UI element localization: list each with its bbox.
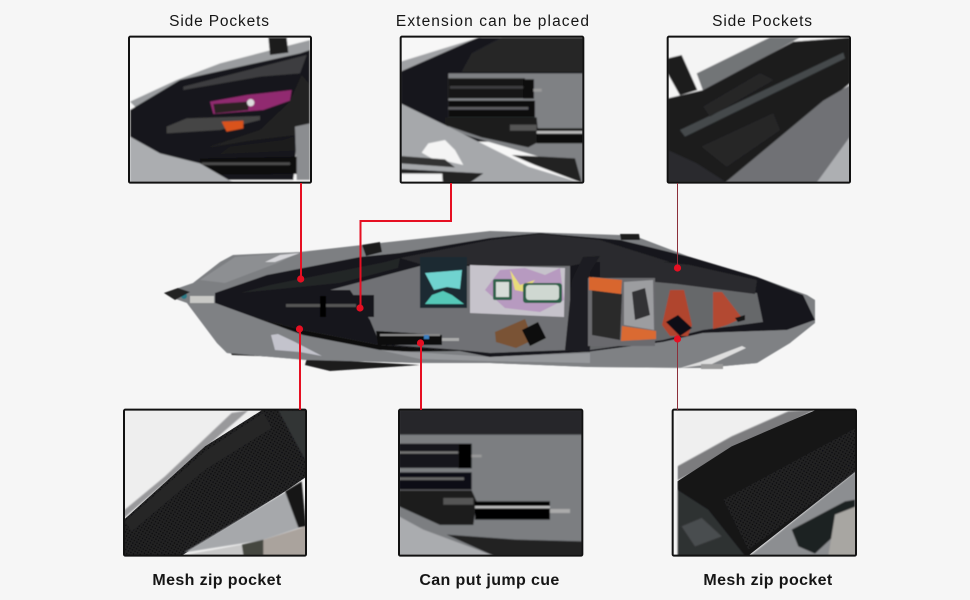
handle tabs: [362, 242, 382, 256]
panel: side pockets photo left: [129, 37, 311, 183]
tip pulls: [701, 364, 723, 369]
bag floor: [330, 266, 570, 353]
caption: mesh zip pocket left: Mesh zip pocket: [152, 572, 282, 589]
connector: mesh zip pocket left: [296, 325, 303, 410]
plastic organizer: [588, 278, 655, 346]
card: chalk holder pack: [470, 265, 565, 317]
connector: jump cue: [417, 339, 424, 410]
bag: open cue case: [164, 231, 815, 371]
panel: mesh zip pocket photo left: [124, 410, 306, 556]
logo marks: [265, 253, 300, 262]
heading: extension can be placed: Extension can be placed: [396, 13, 590, 30]
connector: side pockets left: [297, 183, 304, 283]
brown leather holder: [495, 319, 533, 348]
lower flap grey: [187, 303, 815, 368]
orange labels: [589, 277, 622, 294]
lower zip flap: [215, 303, 460, 352]
upper lining folds: [400, 234, 670, 266]
zipper head: [190, 296, 214, 303]
divider pocket: [565, 256, 600, 352]
connector: side pockets right: [674, 183, 681, 272]
bag outer shell: [164, 231, 815, 368]
bag interior lining: [215, 233, 815, 357]
panel: mesh zip pocket photo right: [673, 410, 856, 556]
panel: jump cue photo: [399, 410, 582, 556]
card: game box: [420, 257, 467, 308]
panel: extension photo: [401, 37, 583, 183]
caption: mesh zip pocket right: Mesh zip pocket: [703, 572, 833, 589]
panel: side pockets photo right: [668, 37, 850, 183]
bag bottom shadow and strap: [227, 347, 420, 371]
heading: side pockets right: Side Pockets: [712, 13, 813, 30]
connector: extension: [356, 183, 451, 312]
heading: side pockets left: Side Pockets: [169, 13, 270, 30]
connector: mesh zip pocket right: [674, 335, 681, 410]
caption: can put jump cue: Can put jump cue: [419, 572, 560, 589]
jump cue: [376, 331, 442, 345]
carbon cue extension: [286, 295, 374, 317]
red cue holders: [662, 290, 692, 336]
